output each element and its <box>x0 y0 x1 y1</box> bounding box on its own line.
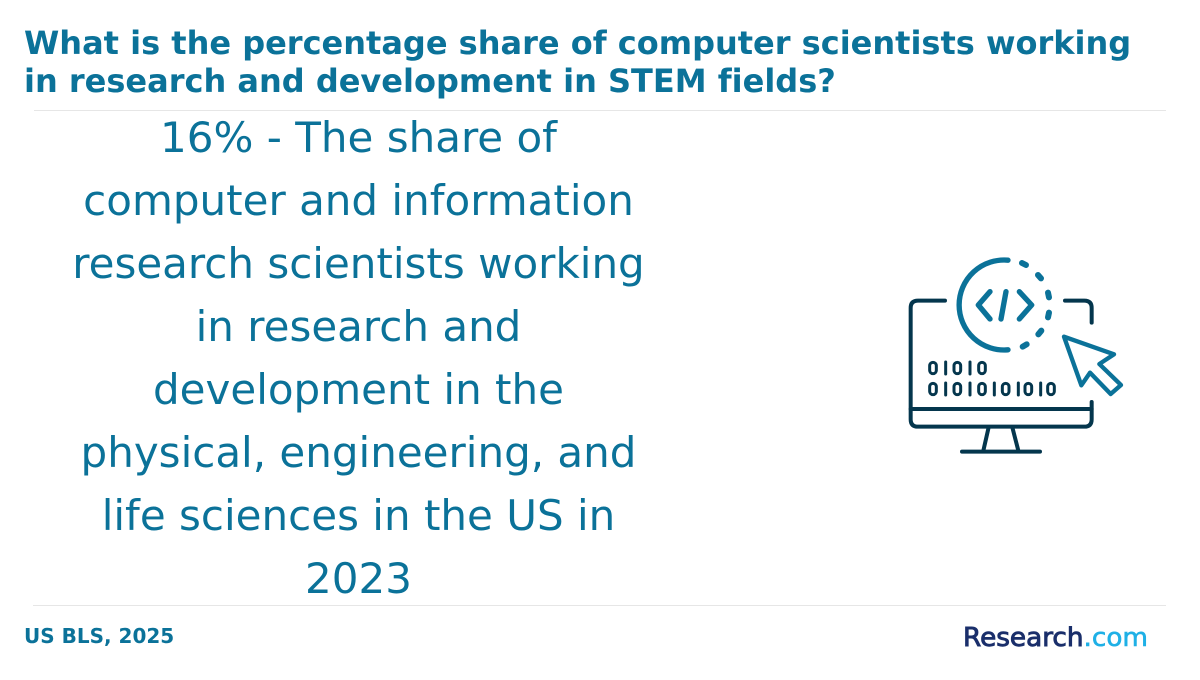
main statistic text: life sciences in the US in <box>102 491 615 540</box>
main statistic text: physical, engineering, and <box>81 428 636 477</box>
main statistic text: research scientists working <box>72 239 645 288</box>
source: US BLS, 2025 <box>24 624 174 648</box>
main statistic text: computer and information <box>83 176 634 225</box>
binary digits <box>930 362 1054 395</box>
main statistic text: development in the <box>153 365 564 414</box>
title <box>24 24 1131 100</box>
monitor frame <box>911 301 1092 452</box>
main statistic text: 16% - The share of <box>160 113 557 162</box>
title: in research and development in STEM fields? <box>24 62 836 100</box>
logo: Research.com: Research.com <box>963 623 1148 653</box>
main statistic text <box>72 113 645 603</box>
code circle and cursor <box>959 260 1121 394</box>
icon: computer monitor with code and cursor <box>908 257 1124 454</box>
main statistic text: 2023 <box>305 554 412 603</box>
title: What is the percentage share of computer scientists working <box>24 24 1131 62</box>
main statistic text: in research and <box>196 302 521 351</box>
